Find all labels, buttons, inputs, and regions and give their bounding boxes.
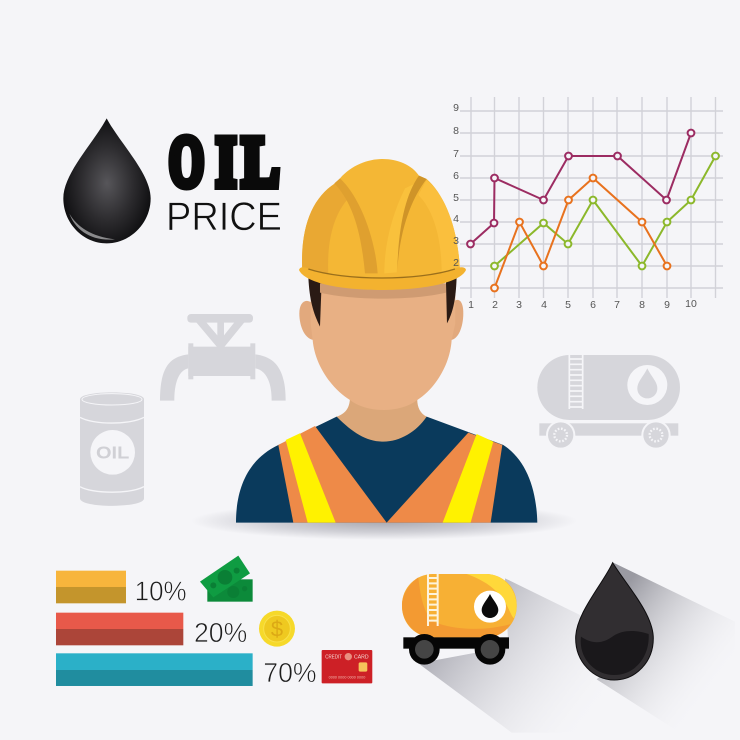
chart axis labels: 6 (453, 170, 459, 182)
chart axis labels: 9 (453, 102, 459, 114)
chart axis labels: 1 (468, 299, 474, 311)
long shadow of black drop (597, 563, 735, 733)
chart axis labels: 7 (614, 299, 620, 311)
icon: gray tanker (537, 355, 680, 450)
bar 70% (56, 653, 253, 686)
chart axis labels: 5 (453, 192, 459, 204)
icon: gray pipe valve (160, 314, 286, 401)
green series (491, 153, 719, 269)
chart axis labels: 5 (565, 299, 571, 311)
bar 20% (56, 613, 183, 645)
title word OIL: O (169, 124, 204, 202)
bar legend (56, 556, 372, 688)
ears (299, 300, 463, 340)
hair (308, 277, 457, 327)
icon: credit card: 0000 0000 0000 0000 (329, 675, 366, 680)
icon: gray oil barrel (80, 392, 144, 506)
title word OIL: I (216, 124, 236, 202)
icon: large black oil drop (63, 118, 151, 243)
chart axis labels: 10 (685, 298, 697, 310)
icon: orange tanker (402, 574, 517, 665)
icon: banknotes (200, 556, 253, 602)
chart axis labels: 6 (590, 299, 596, 311)
safety vest (278, 426, 502, 523)
icon: gold coin (259, 611, 295, 647)
neck (337, 397, 427, 442)
worker figure (236, 159, 537, 523)
label 20%: 20% (194, 617, 247, 648)
hard hat (299, 159, 466, 290)
chart axis labels: 8 (639, 299, 645, 311)
icon: gold coin: $ (271, 617, 283, 642)
purple series (467, 130, 694, 247)
tank ladder (428, 574, 438, 626)
chart axis labels: 7 (453, 148, 459, 160)
chart axis labels: 4 (541, 299, 547, 311)
face (311, 283, 455, 410)
icon: credit card (322, 650, 372, 683)
label 10%: 10% (135, 576, 187, 607)
line chart (453, 97, 723, 311)
chassis and wheels (403, 634, 509, 665)
bar 10% (56, 571, 126, 603)
icon: credit card: CARD (354, 655, 369, 661)
helmet shadow on forehead (320, 283, 446, 299)
icon: dark oil drop (576, 563, 653, 680)
chart labels over helmet: 2 (453, 257, 459, 269)
long shadow of tanker (418, 578, 630, 733)
tank body (402, 574, 517, 637)
chart labels over helmet: 3 (453, 235, 459, 247)
label 70%: 70% (263, 657, 317, 688)
icon: gray oil barrel: OIL (96, 443, 129, 463)
chart axis labels: 8 (453, 125, 459, 137)
chart labels over helmet (453, 213, 459, 269)
shirt (236, 417, 537, 523)
chart axis labels: 3 (516, 299, 522, 311)
chart axis labels: 2 (492, 299, 498, 311)
floor shadow (191, 502, 577, 540)
icon: credit card: CREDIT (325, 655, 342, 661)
worker body (236, 277, 537, 523)
chart axis labels (453, 102, 697, 311)
chart labels over helmet: 4 (453, 213, 459, 225)
tank drop badge (474, 591, 506, 623)
orange series (491, 175, 670, 291)
chart axis labels: 9 (664, 299, 670, 311)
title: OIL PRICE (166, 124, 282, 239)
title word PRICE: PRICE (166, 195, 282, 239)
title word OIL: L (242, 124, 279, 202)
